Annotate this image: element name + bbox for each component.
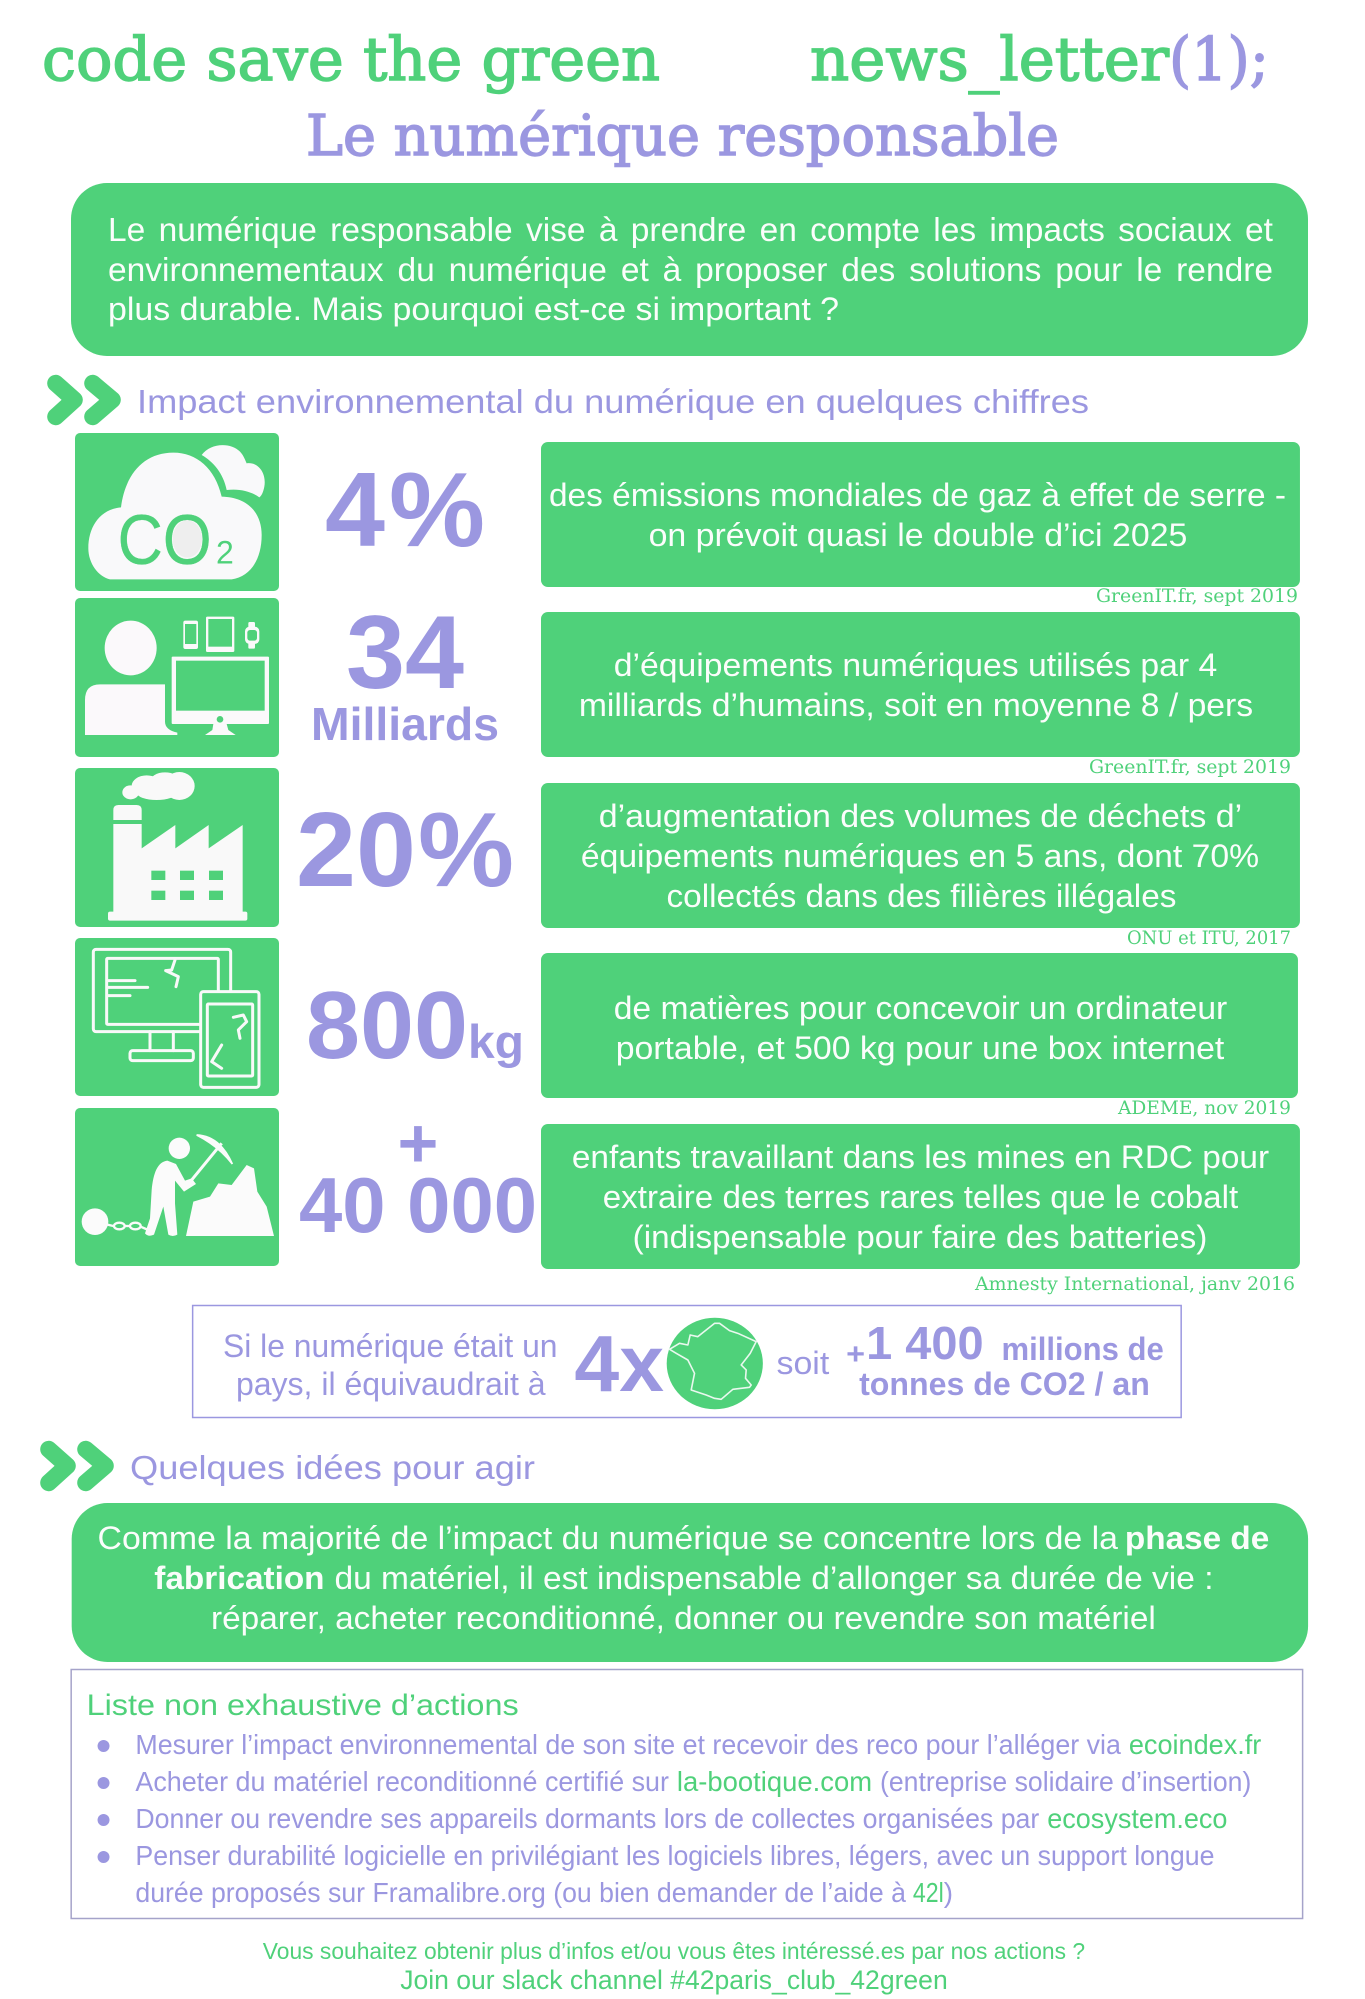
source: ONU et ITU: ONU et ITU, 2017 — [1127, 927, 1291, 949]
panel: stat 1 text — [541, 442, 1300, 587]
number: 800 kg: kg — [468, 1015, 524, 1068]
heading: ideas section: Quelques idées pour agir — [130, 1449, 535, 1486]
list item 4: durée proposés sur Framalibre.org (ou bien demander de l’aide à — [135, 1877, 906, 1908]
panel: stat 3 text — [541, 783, 1300, 928]
panel: intro background — [71, 183, 1308, 356]
text line: intro last line: plus durable. Mais pourquoi est-ce si important ? — [108, 291, 839, 327]
panel: France comparison: 1 400 — [866, 1317, 984, 1369]
panel: stat 2, devices icon — [75, 598, 279, 757]
panel: stat 2 text: d’équipements numériques utilisés par 4 — [614, 647, 1217, 683]
number: + 40 000: 40 000 — [299, 1161, 537, 1249]
subtitle: Le numérique responsable: Le numérique responsable — [306, 104, 1059, 169]
list item 3: Donner ou revendre ses appareils dormants lors de collectes organisées par — [135, 1803, 1039, 1834]
list item 3: ecosystem.eco — [1047, 1803, 1227, 1834]
source: Amnesty International: Amnesty International, janv 2016 — [974, 1273, 1295, 1295]
list item 2: la-bootique.com — [677, 1766, 872, 1797]
number: 34 Milliards: Milliards — [311, 698, 499, 750]
panel: stat 5 text: (indispensable pour faire des batteries) — [633, 1219, 1207, 1255]
icon: section chevrons 2 — [49, 1449, 105, 1483]
source: ADEME: ADEME, nov 2019 — [1117, 1097, 1291, 1119]
panel: stat 3, factory icon — [75, 768, 279, 927]
panel: stat 1 text: des émissions mondiales de gaz à effet de serre - — [549, 477, 1286, 513]
panel: fabrication message: réparer, acheter reconditionné, donner ou revendre son matériel — [211, 1600, 1156, 1636]
title: code save the green news_letter(1);: code save the green — [42, 25, 660, 95]
number: 4% — [325, 451, 485, 569]
title: code save the green news_letter(1);: news_letter — [810, 25, 1169, 95]
list bullets — [98, 1740, 110, 1863]
heading: impact section: Impact environnemental du numérique en quelques chiffres — [137, 383, 1089, 420]
panel: stat 5 text: extraire des terres rares telles que le cobalt — [603, 1179, 1238, 1215]
panel: France comparison: + — [846, 1338, 865, 1371]
number: 4%: % — [389, 451, 485, 569]
number: 20%: % — [418, 791, 514, 909]
panel: France comparison: millions de — [1001, 1331, 1164, 1367]
panel: stat 2 text: milliards d’humains, soit en moyenne 8 / pers — [579, 687, 1253, 723]
list item 2: Acheter du matériel reconditionné certifié sur — [135, 1766, 669, 1797]
panel: stat 4 text: portable, et 500 kg pour une box internet — [616, 1030, 1224, 1066]
source: GreenIT 1: GreenIT.fr, sept 2019 — [1096, 585, 1298, 607]
panel: stat 1 text: on prévoit quasi le double d’ici 2025 — [649, 517, 1187, 553]
icon: section chevrons 1 — [56, 383, 112, 417]
panel: stat 4 text — [541, 953, 1298, 1098]
number: 20% — [296, 791, 514, 909]
number: 34 Milliards: 34 — [346, 595, 464, 711]
panel: France comparison: Si le numérique était un — [223, 1328, 557, 1364]
footer: call to action: Vous souhaitez obtenir plus d’infos et/ou vous êtes intéressé.es par nos actions ? — [263, 1938, 1085, 1964]
number: + 40 000: + — [398, 1104, 438, 1182]
footer: call to action — [263, 1938, 1085, 1995]
panel: fabrication message: phase de — [1125, 1520, 1269, 1556]
footer: call to action: Join our slack channel #42paris_club_42green — [400, 1965, 948, 1995]
panel: stat 2 text — [541, 612, 1300, 757]
text block: intro justified lines — [108, 212, 1273, 288]
source: GreenIT 2: GreenIT.fr, sept 2019 — [1089, 756, 1291, 778]
number: 800 kg: 800 — [306, 972, 468, 1079]
panel: France comparison — [193, 1306, 1181, 1418]
panel: stat 4, broken devices icon — [75, 938, 279, 1096]
list item 1: ecoindex.fr — [1129, 1729, 1261, 1760]
panel: stat 1, CO2 icon — [75, 433, 279, 591]
panel: fabrication message: du matériel, il est indispensable d’allonger sa durée de vie : — [334, 1560, 1214, 1596]
panel: stat 5, miner icon — [75, 1108, 279, 1266]
panel: stat 5 text — [541, 1124, 1300, 1269]
number: 4%: 4 — [325, 451, 385, 569]
number: + 40 000 — [299, 1104, 537, 1249]
number: 20%: 20 — [296, 791, 416, 909]
heading: list title: Liste non exhaustive d’actions — [87, 1689, 519, 1722]
title: code save the green news_letter(1);: (1); — [1169, 25, 1269, 95]
list item 4 — [135, 1840, 1215, 1908]
panel: stat 1, CO2 icon: CO — [118, 500, 212, 579]
panel: France comparison: pays, il équivaudrait à — [236, 1366, 546, 1402]
panel: stat 3 text: collectés dans des filières illégales — [666, 878, 1176, 914]
panel: stat 4 text: de matières pour concevoir un ordinateur — [614, 990, 1228, 1026]
text block: intro justified lines: environnementaux du numérique et à proposer des solutions pour le rendre — [108, 252, 1273, 288]
panel: list of actions — [71, 1670, 1303, 1918]
text block: intro justified lines: Le numérique responsable vise à prendre en compte les impacts sociaux et — [108, 212, 1273, 248]
panel: fabrication message: Comme la majorité de l’impact du numérique se concentre lors de la — [98, 1520, 1118, 1556]
list item 4: ) — [944, 1877, 953, 1908]
list item 2 — [135, 1766, 1251, 1797]
panel: France comparison: tonnes de CO2 / an — [859, 1366, 1150, 1402]
panel: stat 3 text: équipements numériques en 5 ans, dont 70% — [581, 838, 1259, 874]
panel: stat 3 text: d’augmentation des volumes de déchets d’ — [599, 798, 1242, 834]
number: 34 Milliards — [311, 595, 499, 750]
list item 2: (entreprise solidaire d’insertion) — [880, 1766, 1251, 1797]
panel: fabrication message — [72, 1503, 1308, 1662]
list item 4: Penser durabilité logicielle en privilégiant les logiciels libres, légers, avec un support longue — [135, 1840, 1215, 1871]
panel: France comparison: soit — [776, 1345, 829, 1381]
panel: stat 1, CO2 icon: 2 — [216, 534, 234, 570]
title: code save the green news_letter(1); — [42, 25, 1269, 95]
list item 1: Mesurer l’impact environnemental de son site et recevoir des reco pour l’alléger via — [135, 1729, 1121, 1760]
list item 4: 42l — [913, 1877, 944, 1908]
panel: fabrication message: fabrication — [154, 1560, 325, 1596]
icon: France map in green circle — [667, 1318, 763, 1409]
panel: stat 5 text: enfants travaillant dans les mines en RDC pour — [572, 1139, 1269, 1175]
panel: France comparison: 4x — [574, 1319, 664, 1408]
